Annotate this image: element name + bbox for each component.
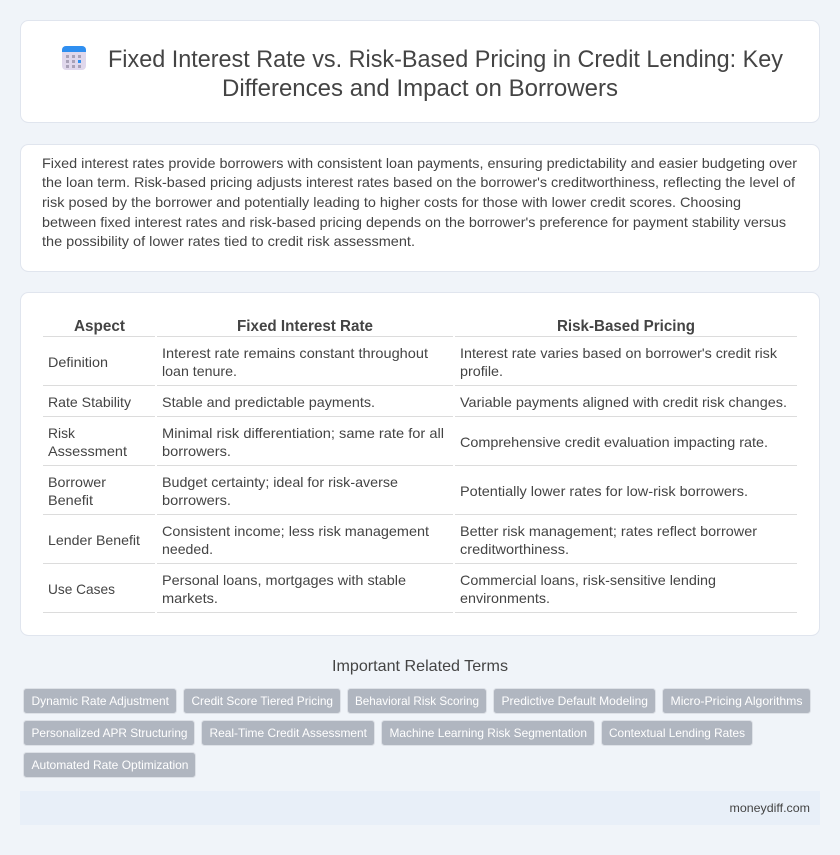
- row: definition: Interest rate remains constant throughout: [162, 345, 428, 361]
- row: borrower benefit: Potentially lower rates for low-risk borrowers.: [460, 483, 748, 499]
- row: definition: [48, 345, 778, 379]
- row: borrower benefit: Borrower: [48, 474, 106, 490]
- row: use cases: environments.: [460, 590, 550, 606]
- title: Differences and Impact on Borrowers: [222, 75, 618, 102]
- panel: introduction: [20, 144, 820, 272]
- row: borrower benefit: [48, 474, 748, 508]
- intro paragraph: between fixed interest rates and risk-based pricing depends on the borrower's preference for payment stability versus: [42, 214, 786, 230]
- row: rate stability: Rate Stability: [48, 394, 131, 410]
- row: risk assessment: borrowers.: [162, 443, 231, 459]
- row: use cases: Personal loans, mortgages with stable: [162, 572, 406, 588]
- footer: [20, 791, 820, 825]
- table header row: [74, 318, 695, 335]
- row: risk assessment: Risk: [48, 425, 76, 441]
- row: borrower benefit: Budget certainty; ideal for risk-averse: [162, 474, 398, 490]
- intro paragraph: Fixed interest rates provide borrowers with consistent loan payments, ensuring predictability and easier budgeting over: [42, 155, 797, 171]
- table header row: Aspect: [74, 318, 126, 335]
- related term tags: Credit Score Tiered Pricing: [192, 694, 333, 708]
- related term tags: Micro-Pricing Algorithms: [670, 694, 802, 708]
- row: rate stability: [48, 394, 787, 410]
- panel: header: [20, 20, 820, 122]
- related term tags: Machine Learning Risk Segmentation: [390, 726, 587, 740]
- row: lender benefit: [48, 523, 757, 557]
- intro paragraph: risk posed by the borrower and potentially leading to higher costs for those with lower credit scores. Choosing: [42, 194, 741, 210]
- row: lender benefit: Consistent income; less risk management: [162, 523, 429, 539]
- row: borrower benefit: borrowers.: [162, 492, 231, 508]
- row: use cases: Commercial loans, risk-sensitive lending: [460, 572, 716, 588]
- intro paragraph: the loan term. Risk-based pricing adjusts interest rates based on the borrower's creditworthiness, reflecting the level of: [42, 174, 795, 190]
- row: risk assessment: [48, 425, 768, 459]
- footer source label: moneydiff.com: [730, 801, 810, 815]
- related term tags: [24, 688, 810, 778]
- icon: calendar: [62, 46, 86, 70]
- row: risk assessment: Minimal risk differentiation; same rate for all: [162, 425, 444, 441]
- row: risk assessment: Assessment: [48, 443, 127, 459]
- row: lender benefit: Lender Benefit: [48, 532, 140, 548]
- row: definition: profile.: [460, 363, 503, 379]
- related term tags: Predictive Default Modeling: [502, 694, 648, 708]
- intro paragraph: the possibility of lower rates tied to credit risk assessment.: [42, 233, 415, 249]
- row: lender benefit: Better risk management; rates reflect borrower: [460, 523, 757, 539]
- row: risk assessment: Comprehensive credit evaluation impacting rate.: [460, 434, 768, 450]
- related term tags: Personalized APR Structuring: [32, 726, 188, 740]
- row: use cases: markets.: [162, 590, 218, 606]
- row: borrower benefit: Benefit: [48, 492, 93, 508]
- panel: comparison table: [20, 292, 820, 636]
- title: Fixed Interest Rate vs. Risk-Based Pricing in Credit Lending: Key: [108, 46, 783, 73]
- row: definition: Interest rate varies based on borrower's credit risk: [460, 345, 778, 361]
- table header row: Risk-Based Pricing: [557, 318, 695, 335]
- related term tags: Real-Time Credit Assessment: [210, 726, 368, 740]
- related term tags: Dynamic Rate Adjustment: [32, 694, 170, 708]
- row: lender benefit: creditworthiness.: [460, 541, 569, 557]
- intro paragraph: [42, 155, 797, 249]
- related term tags: Contextual Lending Rates: [609, 726, 745, 740]
- row: rate stability: Variable payments aligned with credit risk changes.: [460, 394, 787, 410]
- related term tags: Automated Rate Optimization: [32, 758, 188, 772]
- row: definition: loan tenure.: [162, 363, 237, 379]
- row: use cases: Use Cases: [48, 581, 115, 597]
- row: lender benefit: needed.: [162, 541, 213, 557]
- related term tags: Behavioral Risk Scoring: [355, 694, 479, 708]
- heading: important related terms: Important Related Terms: [332, 658, 508, 675]
- row: definition: Definition: [48, 354, 108, 370]
- row: rate stability: Stable and predictable payments.: [162, 394, 375, 410]
- row: use cases: [48, 572, 716, 606]
- title: [108, 46, 783, 102]
- table header row: Fixed Interest Rate: [237, 318, 373, 335]
